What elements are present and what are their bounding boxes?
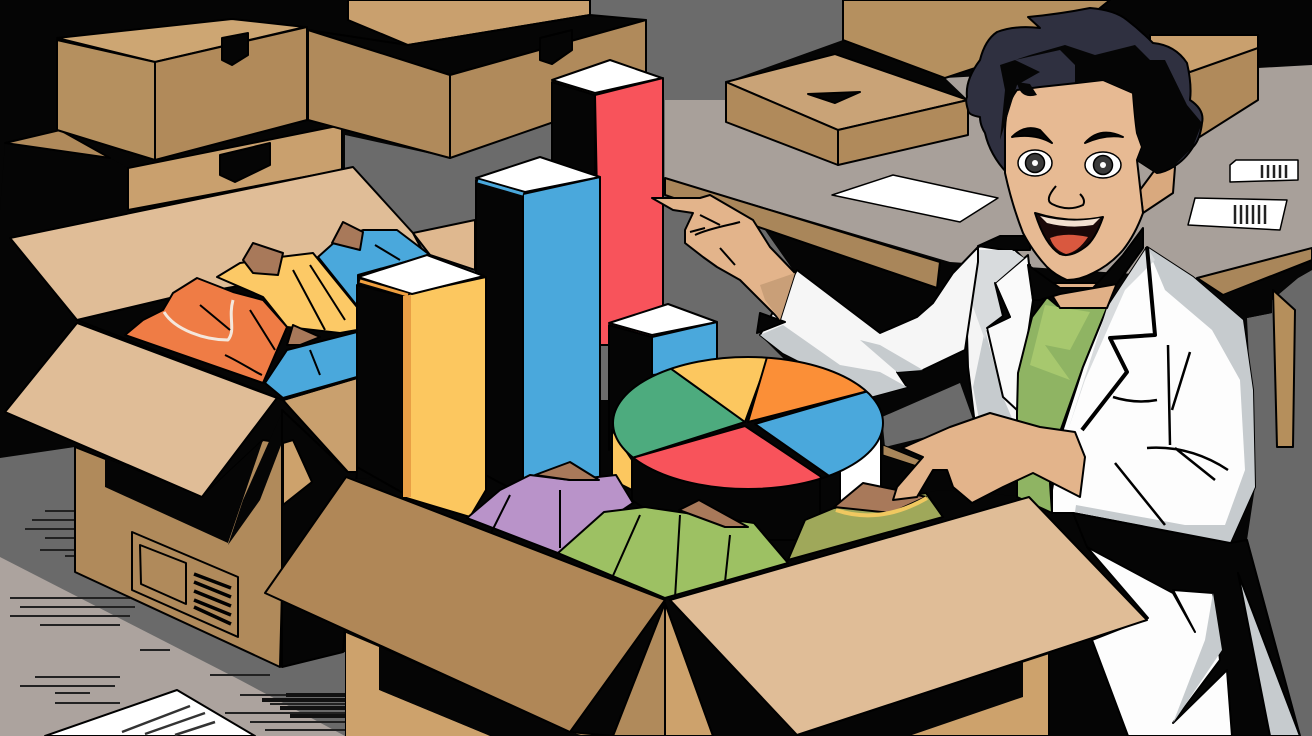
mouth (1035, 213, 1103, 255)
coat left side (965, 240, 1033, 430)
green shirt (1017, 297, 1107, 513)
right hand (893, 413, 1085, 503)
front open box (265, 477, 1147, 736)
neck (1043, 283, 1117, 308)
left sleeve (760, 247, 978, 397)
left lapel (987, 255, 1033, 410)
cuff shadow (757, 313, 785, 333)
ear (1140, 163, 1175, 213)
box stack: top center (308, 0, 646, 158)
pie chart (614, 356, 884, 500)
clothes in left box (125, 222, 430, 398)
black hair shading (1000, 45, 1202, 173)
table (665, 65, 1312, 466)
bar chart: yellow bar (357, 255, 486, 517)
eyes (1018, 150, 1121, 178)
front flap of left box (5, 323, 277, 497)
boxes on table (726, 0, 1258, 165)
pointing hand and forearm (652, 195, 795, 320)
box stack: top left (0, 19, 342, 210)
lower coat white (1087, 547, 1232, 736)
papers on table (832, 160, 1298, 230)
coat right side (1052, 247, 1255, 543)
hair base (966, 8, 1202, 173)
eyebrows (1012, 128, 1123, 143)
right lapel and pocket (1082, 247, 1155, 430)
bar chart: red bar (552, 60, 663, 345)
clothes in front box (467, 462, 943, 598)
scientist (652, 8, 1300, 736)
paper on floor (45, 690, 255, 736)
left open box (10, 167, 475, 667)
nose (1049, 186, 1084, 208)
black shoulder shadow (978, 236, 1030, 250)
bar chart: small blue bar (609, 304, 717, 490)
bar chart: blue bar (476, 157, 600, 495)
lower coat black shadow (1073, 513, 1300, 736)
face (1005, 80, 1143, 280)
black area behind chart (340, 470, 1029, 600)
